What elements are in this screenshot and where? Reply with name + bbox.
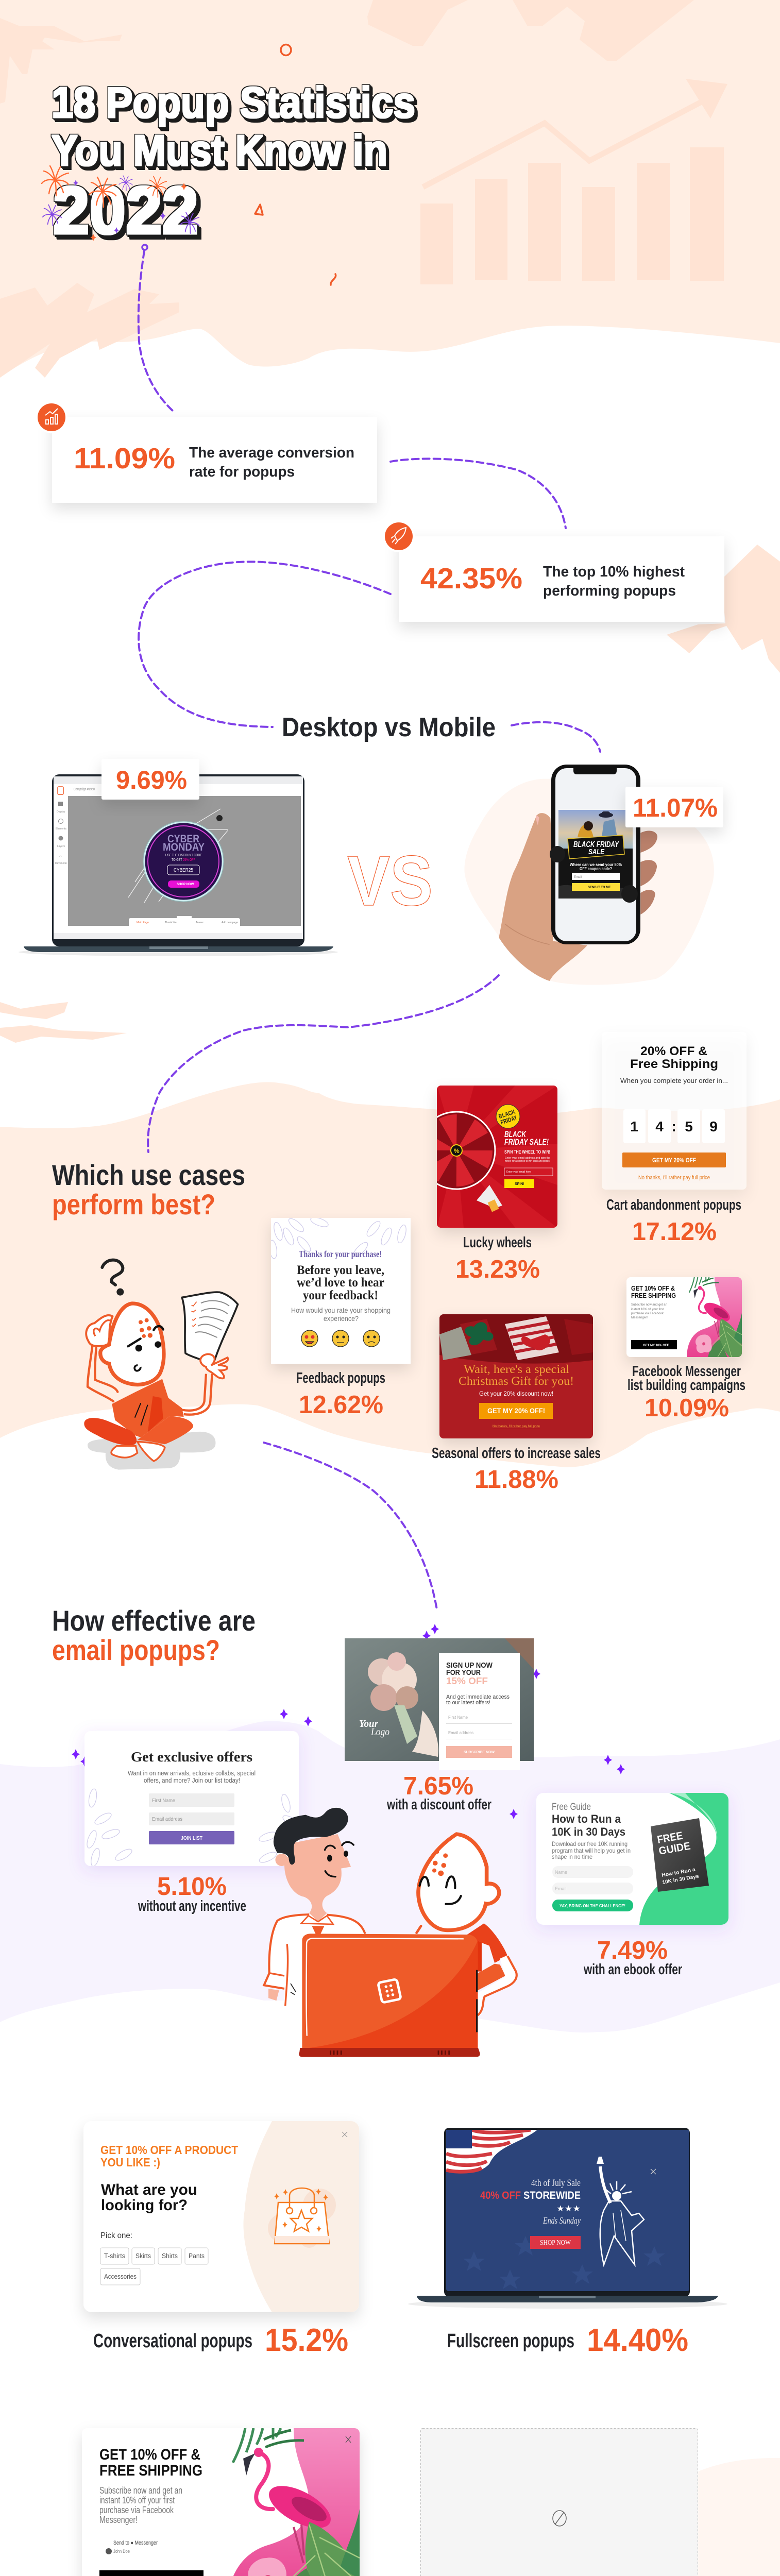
answer choice buttons: Pants: [189, 2252, 205, 2260]
answer choice buttons: Shirts: [162, 2252, 178, 2260]
panel: with images popup: Send to ● Messenger: [113, 2540, 158, 2546]
heading: how effective are email popups: [52, 1604, 256, 1666]
panel: discount offer popup: Email address: [448, 1731, 473, 1735]
title: 2022: [53, 173, 198, 248]
icon: no image placeholder: [553, 2511, 566, 2526]
background: lavender band: [0, 1721, 780, 2032]
panel: no incentive popup: [84, 1731, 301, 1914]
panel: feedback popups: Before you leave,: [297, 1263, 384, 1277]
heading: which use cases perform best: Which use cases: [52, 1159, 245, 1191]
panel: fullscreen popups laptop: [408, 2128, 727, 2358]
panel: top 10% performing: The top 10% highest: [543, 564, 685, 580]
cyber monday popup: SHOP NOW: [177, 883, 194, 886]
panel: seasonal offers: [432, 1314, 601, 1494]
cyber monday popup: CYBER: [167, 833, 199, 845]
panel: fullscreen popups laptop: STOREWIDE: [523, 2190, 581, 2201]
panel: feedback popups: 12.62%: [299, 1391, 383, 1419]
panel: conversational popups: Conversational popups: [93, 2330, 252, 2352]
panel: cart abandonment popups: 20% OFF &: [640, 1044, 707, 1058]
heading: how effective are email popups: email popups?: [52, 1634, 220, 1666]
floral pattern: [85, 1788, 301, 1867]
panel: fullscreen popups laptop: Fullscreen popups: [447, 2330, 574, 2352]
panel: lucky wheels: Enter your email address and spin the: [505, 1157, 550, 1160]
arrow: use cases to email popups: [264, 1443, 437, 1609]
cyber monday popup: USE THE DISCOUNT CODE: [165, 854, 202, 857]
panel: fullscreen popups laptop: 4th of July Sale: [531, 2178, 581, 2189]
laptop editor sidebar: Elements: [56, 827, 66, 831]
panel: discount offer popup: FOR YOUR: [446, 1668, 481, 1677]
icon: fireworks around the year: [42, 166, 199, 241]
icon: statue of liberty: [597, 2157, 644, 2265]
panel: facebook messenger campaigns: GET MY 10% OFF: [643, 1344, 669, 1347]
icon: purple sparkles: [72, 1624, 625, 1819]
arrow: title to first stat: [139, 245, 173, 411]
panel: top 10% performing: [383, 520, 724, 622]
countdown digits: 4: [655, 1118, 664, 1134]
panel: conversational popups: YOU LIKE :): [100, 2156, 160, 2169]
panel: conversational popups: GET 10% OFF A PRODUCT: [100, 2143, 238, 2157]
panel: ebook offer popup: GUIDE: [658, 1840, 691, 1857]
panel: discount offer popup: And get immediate access: [446, 1694, 510, 1700]
panel: cart abandonment popups: Free Shipping: [630, 1057, 718, 1071]
panel: no incentive popup: First Name: [152, 1798, 175, 1804]
panel: seasonal offers: Wait, here's a special: [464, 1363, 569, 1376]
panel: no incentive popup: offers, and more? Join our list today!: [144, 1776, 240, 1784]
panel: ebook offer popup: How to Run a: [552, 1812, 621, 1825]
megaphone: [477, 1185, 502, 1208]
panel: discount offer popup: with a discount offer: [386, 1797, 491, 1813]
icon: chart badge: [36, 401, 67, 433]
panel: cart abandonment popups: 17.12%: [632, 1218, 717, 1246]
panel: seasonal offers: 11.88%: [474, 1466, 558, 1494]
panel: lucky wheels: FRIDAY SALE!: [504, 1137, 549, 1147]
laptop page tabs: Thank You: [165, 921, 177, 924]
panel: conversational popups: looking for?: [101, 2197, 188, 2214]
answer choice buttons: T-shirts: [104, 2252, 125, 2260]
panel: cart abandonment popups: [602, 1032, 747, 1246]
countdown digits: [623, 1109, 725, 1143]
panel: seasonal offers: No thanks, I'll rather pay full price: [493, 1425, 540, 1428]
panel: no incentive popup: Get exclusive offers: [131, 1749, 252, 1765]
panel: discount offer popup: 7.65%: [403, 1772, 473, 1800]
laptop editor sidebar: Display: [57, 810, 65, 814]
black friday popup on phone: SALE: [588, 848, 605, 856]
panel: discount offer popup: SIGN UP NOW: [446, 1661, 493, 1670]
panel: seasonal offers: Get your 20% discount now!: [479, 1390, 553, 1397]
panel: ebook offer popup: How to Run a: [662, 1867, 696, 1878]
panel: ebook offer popup: shape in no time: [552, 1853, 592, 1860]
laptop editor sidebar: Layers: [57, 845, 65, 848]
panel: feedback popups: [268, 1215, 411, 1419]
panel: mobile phone in hand: [464, 765, 723, 985]
cyber monday popup: [128, 809, 228, 903]
laptop editor sidebar: Dev mode: [55, 862, 67, 865]
panel: cart abandonment popups: GET MY 20% OFF: [652, 1157, 696, 1164]
egg character: [417, 1834, 517, 2016]
panel: lucky wheels: %: [454, 1147, 460, 1155]
arrow: second stat to desktop vs mobile: [139, 562, 391, 727]
laptop page tabs: Add new page: [222, 921, 238, 924]
background: top peach wave: [0, 0, 780, 378]
panel: discount offer popup: Logo: [370, 1726, 389, 1738]
icon: shopping bag: [268, 2188, 336, 2248]
panel: discount offer popup: Your: [359, 1718, 378, 1730]
man: [264, 1808, 366, 2006]
badge: desktop rate: [101, 759, 199, 800]
panel: feedback popups: Thanks for your purchase!: [299, 1249, 382, 1259]
panel: no incentive popup: Want in on new arrivals, eclusive collabs, special: [128, 1769, 256, 1777]
panel: ebook offer popup: YAY, BRING ON THE CHALLENGE!: [559, 1904, 625, 1908]
panel: lucky wheels: BLACK: [498, 1108, 516, 1120]
arrow: phone to use cases: [148, 975, 499, 1152]
phone body and screen: [551, 765, 640, 944]
panel: fullscreen popups laptop: ★★★: [556, 2205, 581, 2213]
background: use cases peach band: [0, 1082, 780, 1467]
heading: which use cases perform best: perform best?: [52, 1188, 215, 1221]
black friday popup on phone: Where can we send your 50%: [570, 862, 622, 867]
panel: facebook messenger campaigns: instant 10% off your first: [631, 1308, 664, 1311]
panel: with images popup: GET 10% OFF &: [99, 2446, 200, 2463]
panel: desktop laptop mockup: [19, 759, 338, 956]
countdown digits: :: [671, 1118, 676, 1134]
panel: feedback popups: experience?: [324, 1314, 359, 1323]
panel: ebook offer popup: 10K in 30 Days: [662, 1874, 700, 1886]
answer choice buttons: Skirts: [135, 2252, 151, 2260]
heading: which use cases perform best: [52, 1159, 245, 1221]
panel: no incentive popup: JOIN LIST: [181, 1836, 202, 1841]
black friday popup on phone: OFF coupon code?: [580, 867, 612, 871]
panel: discount offer popup: to our latest offers!: [446, 1700, 490, 1706]
title: 18 Popup Statistics: [52, 78, 415, 127]
panel: average conversion rate: The average conversion: [189, 445, 354, 461]
black friday popup on phone: [550, 810, 638, 903]
title: You Must Know in: [52, 126, 387, 175]
panel: lucky wheels: Enter your email here: [506, 1171, 531, 1174]
panel: discount offer popup: 15% OFF: [446, 1676, 488, 1686]
panel: fullscreen popups laptop: Ends Sunday: [542, 2215, 581, 2226]
panel: ebook offer popup: Free Guide: [552, 1802, 591, 1812]
answer choice buttons: [100, 2248, 208, 2285]
panel: conversational popups: Pick one:: [100, 2231, 132, 2240]
panel: feedback popups: your feedback!: [303, 1289, 378, 1302]
chart illustration: rising bars and arrow: [420, 79, 727, 284]
laptop page tabs: Teaser: [196, 921, 204, 924]
badge: desktop rate: 9.69%: [116, 766, 187, 794]
panel: ebook offer popup: with an ebook offer: [583, 1961, 682, 1978]
panel: discount offer popup: [345, 1638, 534, 1813]
panel: feedback popups: we’d love to hear: [297, 1276, 384, 1290]
panel: ebook offer popup: 7.49%: [597, 1937, 668, 1964]
panel: with images popup: purchase via Facebook: [99, 2505, 174, 2515]
confetti shapes: [255, 44, 336, 285]
laptop editor sidebar: Campaign #1960: [74, 788, 95, 791]
panel: no incentive popup: without any incentive: [138, 1898, 246, 1914]
illustration: two characters behind a laptop: [264, 1808, 517, 2057]
panel: with images popup: John Doe: [113, 2549, 130, 2554]
panel: facebook messenger campaigns: Subscribe now and get an: [631, 1303, 667, 1307]
panel: no incentive popup: Email address: [152, 1817, 182, 1822]
panel: seasonal offers: GET MY 20% OFF!: [487, 1406, 545, 1415]
character: thinking egg with checklist: [84, 1260, 238, 1470]
icon: rocket badge: [383, 520, 415, 552]
panel: lucky wheels: SPIN!: [515, 1182, 524, 1186]
panel: with images popup: [82, 2428, 360, 2576]
laptop editor sidebar: [55, 787, 95, 865]
panel: lucky wheels: BLACK: [504, 1129, 527, 1139]
panel: facebook messenger campaigns: FREE SHIPPING: [631, 1292, 676, 1299]
panel: ebook offer popup: 10K in 30 Days: [552, 1825, 625, 1838]
answer choice buttons: Accessories: [104, 2273, 137, 2280]
panel: feedback popups: Feedback popups: [296, 1370, 385, 1386]
panel: conversational popups: What are you: [101, 2181, 197, 2198]
panel: seasonal offers: Christmas Gift for you!: [459, 1375, 574, 1387]
background: pale peach blob: [547, 2458, 780, 2576]
panel: fullscreen popups laptop: 40% OFF: [480, 2190, 521, 2201]
arrow: first to second stat: [391, 459, 566, 528]
panel: ebook offer popup: FREE: [656, 1830, 684, 1846]
panel: top 10% performing: performing popups: [543, 583, 676, 599]
laptop page tabs: Main Page: [137, 921, 149, 924]
panel: top 10% performing: 42.35%: [420, 562, 522, 595]
panel: conversational popups: [83, 2121, 359, 2358]
panel: with images popup: Messenger!: [99, 2515, 138, 2525]
panel: lucky wheels: Lucky wheels: [463, 1234, 532, 1251]
panel: conversational popups: 15.2%: [265, 2323, 348, 2358]
black friday popup on phone: BLACK FRIDAY: [573, 840, 619, 849]
panel: lucky wheels: [418, 1086, 557, 1283]
panel: feedback popups: How would you rate your shopping: [291, 1306, 391, 1314]
panel: with images popup: FREE SHIPPING: [99, 2462, 202, 2479]
panel: ebook offer popup: Email: [555, 1886, 567, 1891]
countdown digits: 5: [685, 1118, 693, 1134]
heading: how effective are email popups: How effective are: [52, 1604, 256, 1637]
phone backdrop blob: [464, 779, 714, 985]
panel: lucky wheels: wheel for a chance to win cash and prizes!: [505, 1160, 550, 1163]
icon: emoji rating: [301, 1330, 380, 1347]
panel: ebook offer popup: program that will help you get in: [552, 1847, 631, 1854]
cyber monday popup: TO GET 25% OFF: [172, 858, 195, 862]
panel: with images popup: instant 10% off your first: [99, 2495, 175, 2505]
black friday popup on phone: Email: [574, 876, 582, 879]
gifts: [439, 1314, 593, 1364]
countdown digits: 9: [709, 1118, 718, 1134]
laptop page tabs: [129, 916, 240, 926]
VS outline text: VS: [347, 841, 433, 921]
panel: ebook offer popup: [536, 1793, 728, 1978]
panel: discount offer popup: SUBSCRIBE NOW: [464, 1751, 495, 1754]
badge: mobile rate: 11.07%: [633, 793, 718, 822]
panel: facebook messenger campaigns: Messenger!: [631, 1316, 648, 1319]
panel: fullscreen popups laptop: 14.40%: [587, 2323, 688, 2358]
panel: lucky wheels: FRIDAY: [500, 1114, 518, 1126]
panel: fullscreen popups laptop: SHOP NOW: [540, 2239, 571, 2247]
wheel: [437, 1111, 496, 1190]
floral pattern: [268, 1215, 408, 1259]
panel: facebook messenger campaigns: Facebook Messenger: [632, 1363, 741, 1380]
badge: mobile rate: [625, 787, 723, 827]
american flag: [446, 2130, 537, 2173]
panel: average conversion rate: rate for popups: [189, 464, 295, 480]
panel: without images: [420, 2429, 698, 2576]
title: [52, 78, 415, 248]
decorative brush strokes: [0, 0, 780, 1043]
laptop editor sidebar: ‹›: [59, 855, 62, 858]
panel: average conversion rate: [36, 401, 377, 503]
hand holding phone: [499, 813, 657, 981]
panel: facebook messenger campaigns: 10.09%: [645, 1394, 729, 1422]
panel: cart abandonment popups: When you complete your order in...: [620, 1077, 728, 1084]
panel: seasonal offers: Seasonal offers to increase sales: [432, 1445, 601, 1462]
panel: facebook messenger campaigns: GET 10% OFF &: [631, 1284, 675, 1292]
black friday popup on phone: SEND IT TO ME: [588, 886, 611, 889]
panel: average conversion rate: 11.09%: [74, 442, 175, 475]
panel: facebook messenger campaigns: [626, 1277, 745, 1422]
panel: discount offer popup: First Name: [448, 1715, 468, 1720]
panel: cart abandonment popups: No thanks, I'll rather pay full price: [638, 1175, 710, 1181]
countdown digits: 1: [630, 1118, 638, 1134]
panel: no incentive popup: 5.10%: [157, 1873, 227, 1901]
cyber monday popup: CYBER25: [174, 868, 193, 873]
arrow: heading to phone: [512, 722, 600, 752]
panel: with images popup: Subscribe now and get an: [99, 2485, 182, 2496]
book: [651, 1818, 709, 1892]
panel: ebook offer popup: Name: [555, 1870, 567, 1875]
panel: lucky wheels: 13.23%: [455, 1256, 540, 1283]
cyber monday popup: MONDAY: [163, 841, 205, 853]
panel: facebook messenger campaigns: purchase via Facebook: [631, 1312, 664, 1315]
laptop: [299, 1934, 480, 2057]
heading: desktop vs mobile: Desktop vs Mobile: [282, 713, 496, 742]
panel: lucky wheels: SPIN THE WHEEL TO WIN!: [504, 1149, 550, 1155]
panel: ebook offer popup: Download our free 10K running: [552, 1840, 628, 1848]
